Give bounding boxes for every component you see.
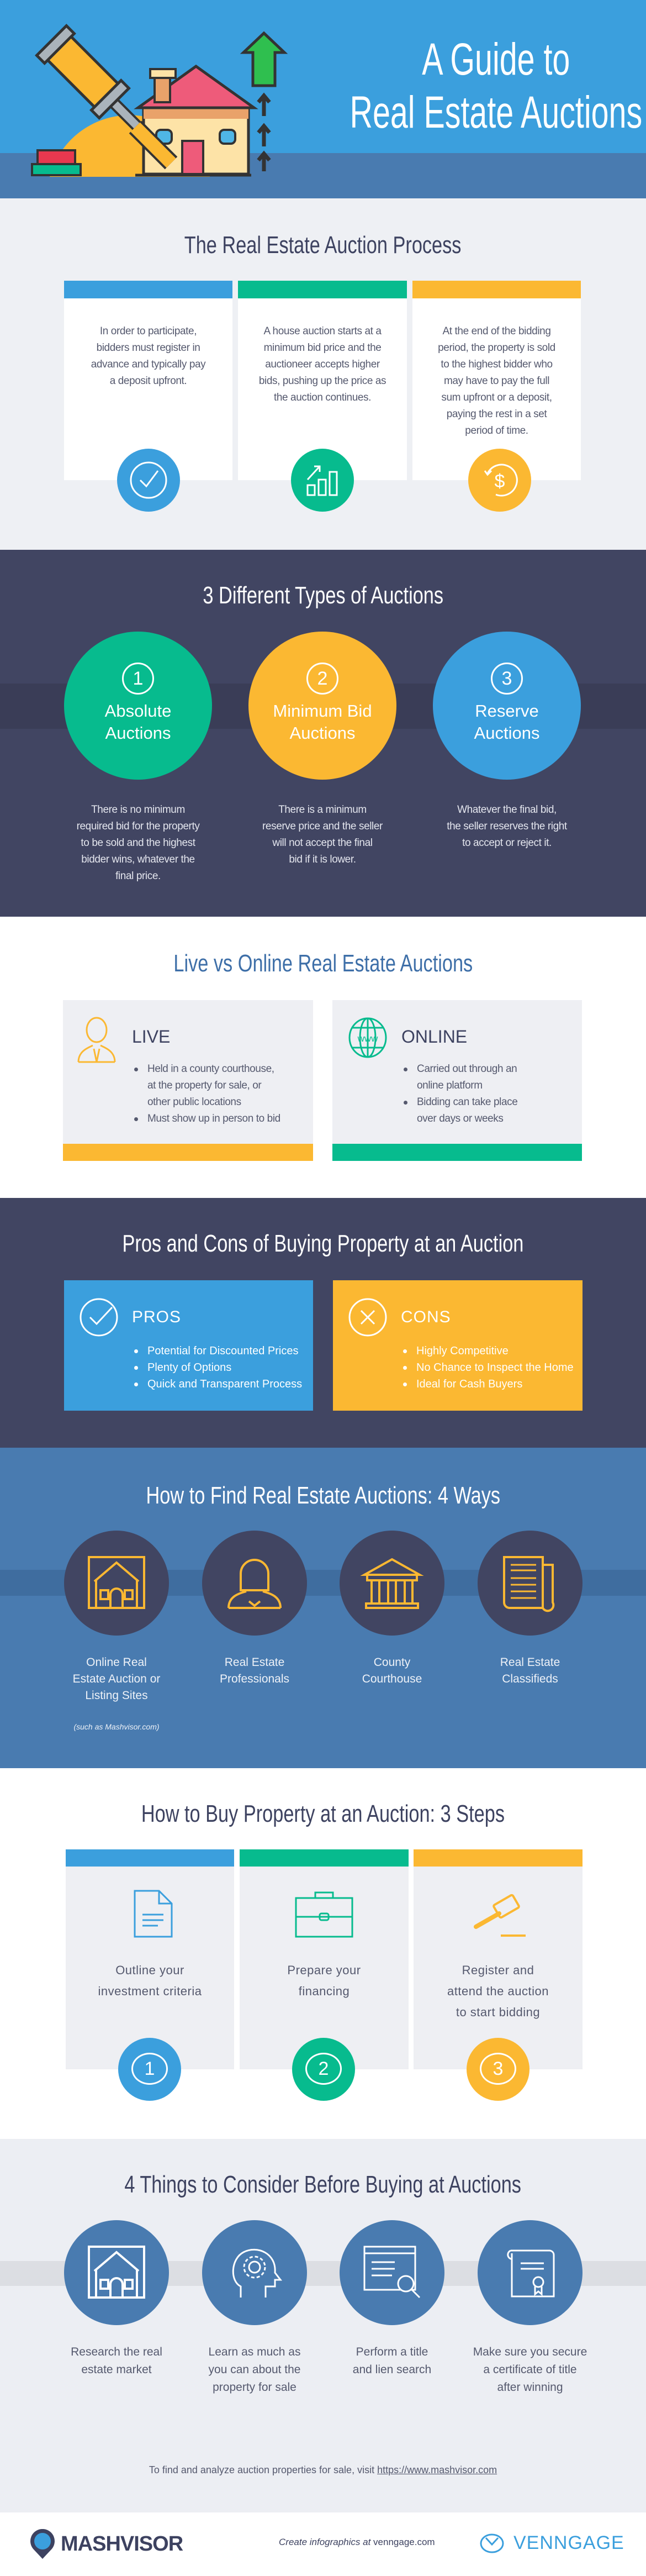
label: title search: Perform a title [356, 2346, 428, 2358]
label: classifieds [500, 1656, 560, 1685]
label: title search: and lien search [353, 2363, 431, 2376]
text: absolute: final price. [115, 870, 161, 882]
icon: globe: www [357, 1033, 378, 1044]
label: courthouse [362, 1656, 422, 1685]
heading: types: 3 Different Types of Auctions [203, 582, 443, 609]
icon: classifieds [478, 1531, 583, 1636]
icon: briefcase [295, 1892, 353, 1937]
card: bidding [238, 281, 407, 480]
title [350, 34, 642, 138]
circle: minimum bid: Minimum Bid [273, 701, 372, 721]
icon: professional [202, 1531, 307, 1636]
label: online sites: Listing Sites [85, 1689, 148, 1702]
bullets: online [404, 1063, 517, 1124]
label: certificate: a certificate of title [483, 2363, 577, 2376]
text: reserve: the seller reserves the right [447, 821, 567, 832]
card: step 3 [414, 1849, 583, 2069]
icon: person [77, 1017, 116, 1063]
panel: cons: CONS [401, 1308, 451, 1326]
number 2 [292, 2038, 355, 2101]
icon: courthouse [340, 1531, 444, 1636]
panel: online [332, 1000, 582, 1161]
card: step 1: Outline your [115, 1963, 184, 1977]
text: reserve: to accept or reject it. [462, 837, 552, 849]
icon: gavel [474, 1894, 526, 1937]
footer [0, 2512, 646, 2576]
circle: reserve [433, 632, 581, 780]
bullets: cons: No Chance to Inspect the Home [416, 1361, 574, 1374]
card: step 3: Register and [462, 1963, 534, 1977]
label: research: Research the real [71, 2346, 162, 2358]
number 1: 1 [145, 2058, 155, 2079]
title: A Guide to [422, 34, 570, 85]
card: register: advance and typically pay [91, 359, 205, 370]
icon: x [349, 1298, 386, 1336]
heading: live vs online: Live vs Online Real Estate Auctions [173, 950, 473, 977]
card: sale: may have to pay the full [444, 375, 549, 387]
label: certificate [473, 2346, 587, 2394]
card: step 2 [240, 1849, 409, 2069]
circle: reserve: Auctions [474, 723, 539, 743]
label: classifieds: Real Estate [500, 1656, 560, 1669]
circle: absolute: Auctions [105, 723, 171, 743]
logo: venngage: VENNGAGE [513, 2532, 624, 2553]
label: professionals: Real Estate [225, 1656, 284, 1669]
bullets: live: at the property for sale, or [147, 1080, 261, 1091]
circle: absolute: Absolute [105, 701, 171, 721]
bullets: online: Bidding can take place [417, 1096, 517, 1108]
icon: dollar [468, 449, 531, 512]
section: auction process [0, 198, 646, 550]
footer note: To find and analyze auction properties for sale, visit https://www.mashvisor.com [149, 2464, 497, 2475]
heading: find: How to Find Real Estate Auctions: 4 Ways [146, 1482, 500, 1509]
text: reserve: Whatever the final bid, [457, 804, 557, 816]
section: things to consider [0, 2139, 646, 2512]
section: buy steps [0, 1768, 646, 2139]
bullets: online: over days or weeks [417, 1113, 503, 1124]
number 3 [467, 2038, 529, 2101]
icon: head gear [202, 2220, 307, 2325]
panel: pros: PROS [132, 1308, 181, 1326]
circle: reserve: Reserve [475, 701, 539, 721]
section: live vs online [0, 917, 646, 1198]
bullets: live: other public locations [147, 1096, 241, 1108]
bullets: cons: Ideal for Cash Buyers [416, 1378, 522, 1390]
label: learn: Learn as much as [209, 2346, 300, 2358]
bullets: online: Carried out through an [417, 1063, 517, 1075]
label: courthouse: Courthouse [362, 1673, 422, 1685]
header [0, 0, 646, 198]
icon: check [80, 1298, 118, 1336]
title: Real Estate Auctions [350, 87, 642, 138]
card: step 1 [66, 1849, 234, 2069]
circle: minimum bid: 2 [317, 668, 327, 689]
label: online sites: Online Real [86, 1656, 147, 1669]
text: absolute: to be sold and the highest [81, 837, 195, 849]
label: professionals [220, 1656, 289, 1685]
label: courthouse: County [374, 1656, 410, 1669]
heading: process: The Real Estate Auction Process [184, 232, 462, 259]
credit: venngage: Create infographics at venngage.com [279, 2537, 435, 2547]
heading: consider: 4 Things to Consider Before Buying at Auctions [125, 2171, 521, 2198]
bullets: cons [403, 1345, 574, 1390]
text: minimum bid [262, 804, 383, 865]
text: reserve [447, 804, 568, 849]
label: online sites: Estate Auction or [73, 1673, 160, 1685]
text: absolute: required bid for the property [77, 821, 199, 832]
label: online sites [73, 1656, 160, 1702]
label: learn [209, 2346, 300, 2394]
bullets: live: Must show up in person to bid [147, 1113, 280, 1124]
illustration: gavel and house [31, 24, 288, 177]
number 2: 2 [319, 2058, 329, 2079]
icon: certificate [478, 2220, 583, 2325]
label: research: estate market [81, 2363, 152, 2376]
panel: pros [64, 1280, 313, 1411]
circle: absolute: 1 [133, 668, 143, 689]
icon: title search [340, 2220, 444, 2325]
card: sale: period, the property is sold [438, 342, 555, 354]
bullets: live [134, 1063, 280, 1124]
circle: minimum bid: Auctions [290, 723, 355, 743]
label: title search [353, 2346, 431, 2376]
label: learn: property for sale [213, 2381, 296, 2394]
label: research [71, 2346, 162, 2376]
card: step 2: Prepare your [287, 1963, 361, 1977]
circle: absolute [64, 632, 212, 780]
heading: buy steps: How to Buy Property at an Auction: 3 Steps [141, 1800, 505, 1827]
icon: check [117, 449, 180, 512]
icon: house [64, 1531, 169, 1636]
icon: research [64, 2220, 169, 2325]
text: absolute [77, 804, 200, 882]
card: sale: sum upfront or a deposit, [441, 392, 552, 403]
label: online: ONLINE [401, 1027, 467, 1047]
bullets: pros: Potential for Discounted Prices [147, 1345, 298, 1357]
label: live: LIVE [132, 1027, 170, 1047]
bullets: online: online platform [417, 1080, 483, 1091]
label: certificate: after winning [497, 2381, 563, 2394]
circle: reserve: 3 [502, 668, 512, 689]
icon: dollar: $ [495, 471, 505, 492]
card: bidding: bids, pushing up the price as [259, 375, 386, 387]
bullets: pros: Quick and Transparent Process [147, 1378, 302, 1390]
section: types of auctions [0, 550, 646, 917]
bullets: cons: Highly Competitive [416, 1345, 509, 1357]
bullets: pros [134, 1345, 302, 1390]
logo: mashvisor [30, 2529, 183, 2559]
icon: document [134, 1890, 172, 1937]
number 1 [118, 2038, 181, 2101]
label: classifieds: Classifieds [502, 1673, 558, 1685]
text: minimum bid: There is a minimum [278, 804, 367, 816]
card: register: a deposit upfront. [110, 375, 187, 387]
panel: cons [333, 1280, 583, 1411]
label: certificate: Make sure you secure [473, 2346, 587, 2358]
label: professionals: Professionals [220, 1673, 289, 1685]
card: sale: At the end of the bidding [443, 325, 551, 337]
text: minimum bid: reserve price and the seller [262, 821, 383, 832]
note: (such as Mashvisor.com) [73, 1722, 160, 1731]
heading: pros cons: Pros and Cons of Buying Property at an Auction [123, 1230, 523, 1257]
text: minimum bid: bid if it is lower. [289, 854, 356, 865]
card: sale: period of time. [465, 425, 528, 437]
section: pros and cons [0, 1198, 646, 1448]
card: step 2: financing [299, 1984, 350, 1998]
bullets: pros: Plenty of Options [147, 1361, 231, 1374]
bullets: live: Held in a county courthouse, [147, 1063, 274, 1075]
label: learn: you can about the [209, 2363, 300, 2376]
text: absolute: bidder wins, whatever the [81, 854, 195, 865]
text: minimum bid: will not accept the final [272, 837, 373, 849]
panel: live [63, 1000, 313, 1161]
text: absolute: There is no minimum [91, 804, 185, 816]
card: sale: to the highest bidder who [441, 359, 553, 370]
card: register [64, 281, 232, 480]
icon: chart [291, 449, 354, 512]
card: sale [412, 281, 581, 480]
circle: minimum bid [248, 632, 396, 780]
card: sale: paying the rest in a set [447, 408, 547, 420]
card: bidding: the auction continues. [274, 392, 371, 403]
card: step 3: attend the auction [447, 1984, 549, 1998]
card: register: bidders must register in [97, 342, 200, 354]
number 3: 3 [493, 2058, 503, 2079]
card: register: In order to participate, [100, 325, 197, 337]
card: step 1: investment criteria [98, 1984, 202, 1998]
card: bidding: auctioneer accepts higher [265, 359, 380, 370]
card: step 3: to start bidding [456, 2005, 540, 2019]
logo: mashvisor: MASHVISOR [61, 2532, 183, 2556]
card: bidding: A house auction starts at a [263, 325, 382, 337]
card: bidding: minimum bid price and the [264, 342, 381, 354]
icon: globe [349, 1018, 386, 1058]
section: find auctions [0, 1448, 646, 1768]
